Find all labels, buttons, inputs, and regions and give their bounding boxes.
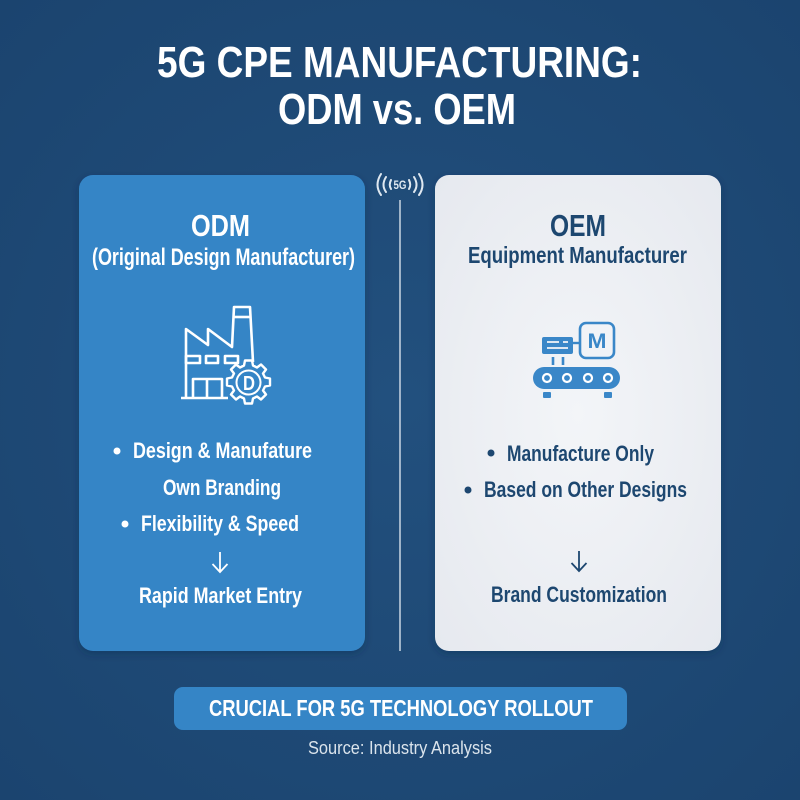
icon: conveyor machine	[533, 323, 620, 398]
ODM bullet list	[114, 438, 312, 608]
icon: 5G signal: 5G	[394, 178, 406, 192]
arrow: OEM down	[572, 551, 586, 571]
OEM heading	[468, 208, 687, 268]
center divider	[399, 200, 401, 651]
panel: ODM	[79, 175, 365, 651]
ODM bullet list: Rapid Market Entry	[139, 583, 303, 608]
OEM bullet list: Brand Customization	[491, 582, 667, 607]
icon: factory with D gear: D	[243, 373, 255, 395]
source: Source: Industry Analysis	[308, 738, 492, 758]
ODM heading: ODM	[191, 208, 250, 243]
callout banner: CRUCIAL FOR 5G TECHNOLOGY ROLLOUT	[209, 695, 593, 721]
icon: 5G signal	[378, 174, 422, 195]
icon: conveyor machine: M	[588, 330, 606, 353]
arrow: ODM down	[212, 552, 228, 572]
OEM bullet list: Manufacture Only	[507, 441, 655, 466]
title	[157, 38, 642, 134]
OEM heading: OEM	[550, 208, 606, 243]
title: 5G CPE MANUFACTURING:	[157, 38, 642, 87]
OEM bullet list	[464, 441, 687, 607]
panel: OEM	[435, 175, 721, 651]
ODM bullet list: Own Branding	[163, 475, 281, 500]
ODM heading	[92, 208, 355, 271]
OEM heading: Equipment Manufacturer	[468, 242, 687, 268]
OEM bullet list: Based on Other Designs	[484, 477, 687, 502]
ODM heading: (Original Design Manufacturer)	[92, 244, 355, 271]
title: ODM vs. OEM	[278, 85, 516, 134]
icon: factory with D gear	[181, 307, 270, 404]
callout banner	[174, 687, 627, 730]
ODM bullet list: Design & Manufature	[133, 438, 312, 463]
ODM bullet list: Flexibility & Speed	[141, 511, 299, 536]
